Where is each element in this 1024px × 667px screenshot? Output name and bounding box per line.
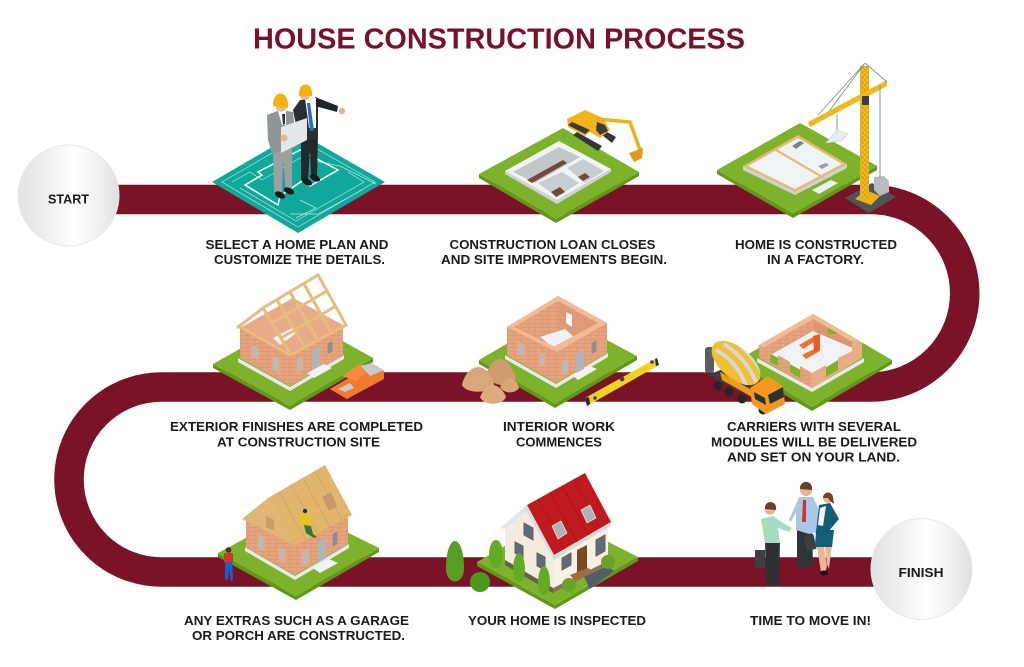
panel: step 8 home is inspected <box>446 473 646 628</box>
start marker <box>18 145 119 246</box>
label: step 2 <box>441 238 667 267</box>
icon: roofer worker <box>298 509 317 538</box>
icon: cypress trees and shrub <box>446 540 550 595</box>
finish marker: FINISH <box>898 566 944 580</box>
winding road path <box>69 200 965 572</box>
label: step 4: AND SET ON YOUR LAND. <box>727 450 900 464</box>
icon: handshake group <box>755 482 839 586</box>
label: step 1: SELECT A HOME PLAN AND <box>206 238 388 252</box>
icon: green lot with excavated foundation <box>479 128 639 223</box>
label: step 4: MODULES WILL BE DELIVERED <box>711 436 917 450</box>
label: step 9: TIME TO MOVE IN! <box>750 614 871 628</box>
panel: step 1 select a home plan <box>206 84 388 267</box>
label: step 1: CUSTOMIZE THE DETAILS. <box>214 253 385 267</box>
engineer right <box>293 84 345 187</box>
engineer left <box>267 93 297 200</box>
panel: step 9 time to move in <box>750 482 871 628</box>
label: step 4 <box>711 420 917 464</box>
label: step 6: AT CONSTRUCTION SITE <box>217 436 380 450</box>
icon: yellow excavator <box>567 110 643 162</box>
panel: step 7 extras such as garage or porch <box>184 465 409 643</box>
icon: blueprint platform <box>212 132 385 233</box>
panel: step 3 home constructed in a factory <box>717 63 897 267</box>
label: step 3: IN A FACTORY. <box>767 253 864 267</box>
label: step 8: YOUR HOME IS INSPECTED <box>468 614 646 628</box>
icon: lot with floor frame <box>717 123 877 218</box>
icon: sand piles <box>462 359 519 404</box>
label: step 4: CARRIERS WITH SEVERAL <box>727 420 901 434</box>
person: left man with briefcase <box>755 502 792 586</box>
icon: two engineers with hard hats <box>267 84 345 200</box>
label: step 5 <box>503 420 615 450</box>
panel: step 5 interior work commences <box>462 296 659 450</box>
icon: stacked bricks <box>330 363 384 399</box>
icon: lot with low brick walls <box>735 314 892 411</box>
label: step 6: EXTERIOR FINISHES ARE COMPLETED <box>170 420 423 434</box>
rolled-out plan sheet <box>281 118 307 153</box>
panel: step 6 exterior finishes <box>170 275 423 450</box>
label: step 5: INTERIOR WORK <box>503 420 615 434</box>
icon: worker in blue overalls <box>224 547 233 582</box>
label: step 1 <box>206 238 388 267</box>
label: step 5: COMMENCES <box>516 436 602 450</box>
icon: cement mixer truck <box>705 340 785 414</box>
icon: spirit level <box>585 358 659 406</box>
label: step 3 <box>735 238 897 267</box>
panel: step 2 construction loan and site improvements <box>441 110 667 267</box>
finish marker <box>871 518 972 620</box>
start marker: START <box>48 192 89 206</box>
label: step 2: AND SITE IMPROVEMENTS BEGIN. <box>441 253 667 267</box>
person: middle man in blue shirt <box>789 482 818 568</box>
label: step 3: HOME IS CONSTRUCTED <box>735 238 897 252</box>
icon: lot with finished house <box>477 473 638 609</box>
label: step 7: OR PORCH ARE CONSTRUCTED. <box>192 629 405 643</box>
label: step 7: ANY EXTRAS SUCH AS A GARAGE <box>184 614 409 628</box>
label: step 2: CONSTRUCTION LOAN CLOSES <box>450 238 656 252</box>
icon: lot with brick house and roof trusses <box>213 275 373 410</box>
title: HOUSE CONSTRUCTION PROCESS <box>253 24 745 56</box>
icon: lot with roofless brick house <box>479 296 637 408</box>
icon: lot with wood-roof house <box>218 465 379 600</box>
panel: step 4 carriers deliver modules <box>704 314 917 464</box>
label: step 6 <box>170 420 423 450</box>
icon: tower crane <box>808 63 896 213</box>
person: woman in teal suit <box>815 492 839 576</box>
label: step 7 <box>184 614 409 643</box>
